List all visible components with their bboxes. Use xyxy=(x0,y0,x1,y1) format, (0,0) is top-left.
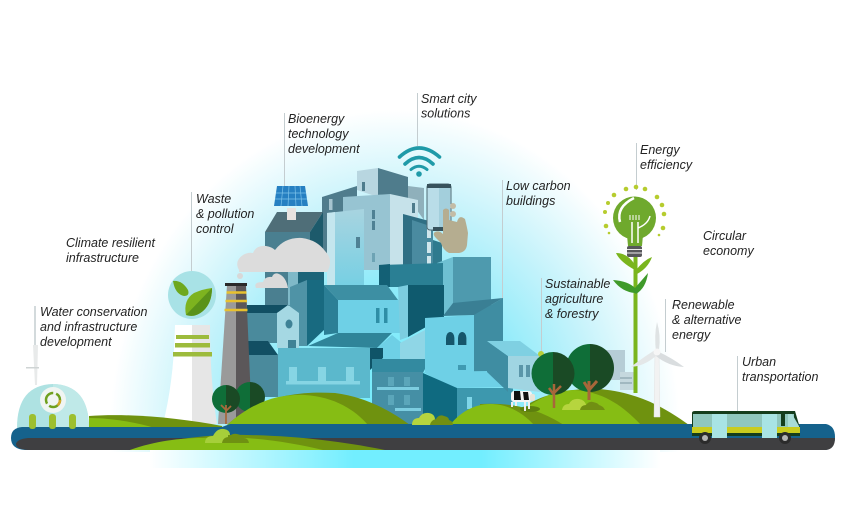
hills xyxy=(89,389,689,428)
label: agriculture: agriculture xyxy=(545,292,603,306)
icon: solar panel xyxy=(274,186,308,220)
left low buildings xyxy=(247,305,383,398)
right small house xyxy=(487,341,540,392)
upper tower group xyxy=(322,168,424,297)
icon: wind turbine xyxy=(631,322,684,417)
label: waste: & pollution xyxy=(196,207,254,221)
foreground hill xyxy=(130,435,385,450)
label: smart city: solutions xyxy=(421,106,470,120)
road and river xyxy=(11,424,835,450)
distant right buildings xyxy=(600,350,636,390)
background glow xyxy=(0,100,850,468)
label: renewable: energy xyxy=(672,328,711,342)
label: water: development xyxy=(40,335,112,349)
label: bioenergy: technology xyxy=(288,127,349,141)
label: smart city: Smart city xyxy=(421,92,477,106)
label: circular economy: economy xyxy=(703,244,754,258)
label: low carbon: buildings xyxy=(506,194,555,208)
label: low carbon: Low carbon xyxy=(506,179,571,193)
icon: smartphone and hand xyxy=(427,184,468,253)
label: renewable: Renewable xyxy=(672,298,735,312)
smokestack xyxy=(218,283,252,424)
label: water: and infrastructure xyxy=(40,320,137,334)
label: urban transportation: Urban xyxy=(742,355,776,369)
bushes xyxy=(205,399,605,443)
buildings xyxy=(247,168,636,425)
arched building xyxy=(423,298,513,425)
icon: wifi xyxy=(400,148,440,177)
label: waste: control xyxy=(196,222,235,236)
icon: energy-efficient bulb plant xyxy=(603,185,666,393)
label: bioenergy: Bioenergy xyxy=(288,112,344,126)
label: agriculture: & forestry xyxy=(545,307,599,321)
centre lower building xyxy=(372,359,430,425)
label: waste: Waste xyxy=(196,192,231,206)
label: urban transportation: transportation xyxy=(742,370,818,384)
label: water: Water conservation xyxy=(40,305,147,319)
label: energy efficiency: efficiency xyxy=(640,158,693,172)
cooling tower xyxy=(163,325,217,424)
left trees xyxy=(212,382,265,424)
label: renewable: & alternative xyxy=(672,313,742,327)
cow xyxy=(511,391,540,412)
label: energy efficiency: Energy xyxy=(640,143,680,157)
water dome xyxy=(17,345,89,428)
label: agriculture: Sustainable xyxy=(545,277,610,291)
left dark-roofed house xyxy=(265,212,324,317)
icon: bus xyxy=(692,411,800,444)
right trees xyxy=(532,344,614,408)
icon: clouds xyxy=(237,238,330,288)
label: climate: Climate resilient xyxy=(66,236,155,250)
label: bioenergy: development xyxy=(288,142,360,156)
icon: leaf globe xyxy=(168,271,216,319)
dome water pillars xyxy=(29,414,76,429)
label: climate: infrastructure xyxy=(66,251,139,265)
leader lines xyxy=(35,93,738,411)
stepped mid buildings xyxy=(290,214,491,360)
label: circular economy: Circular xyxy=(703,229,746,243)
